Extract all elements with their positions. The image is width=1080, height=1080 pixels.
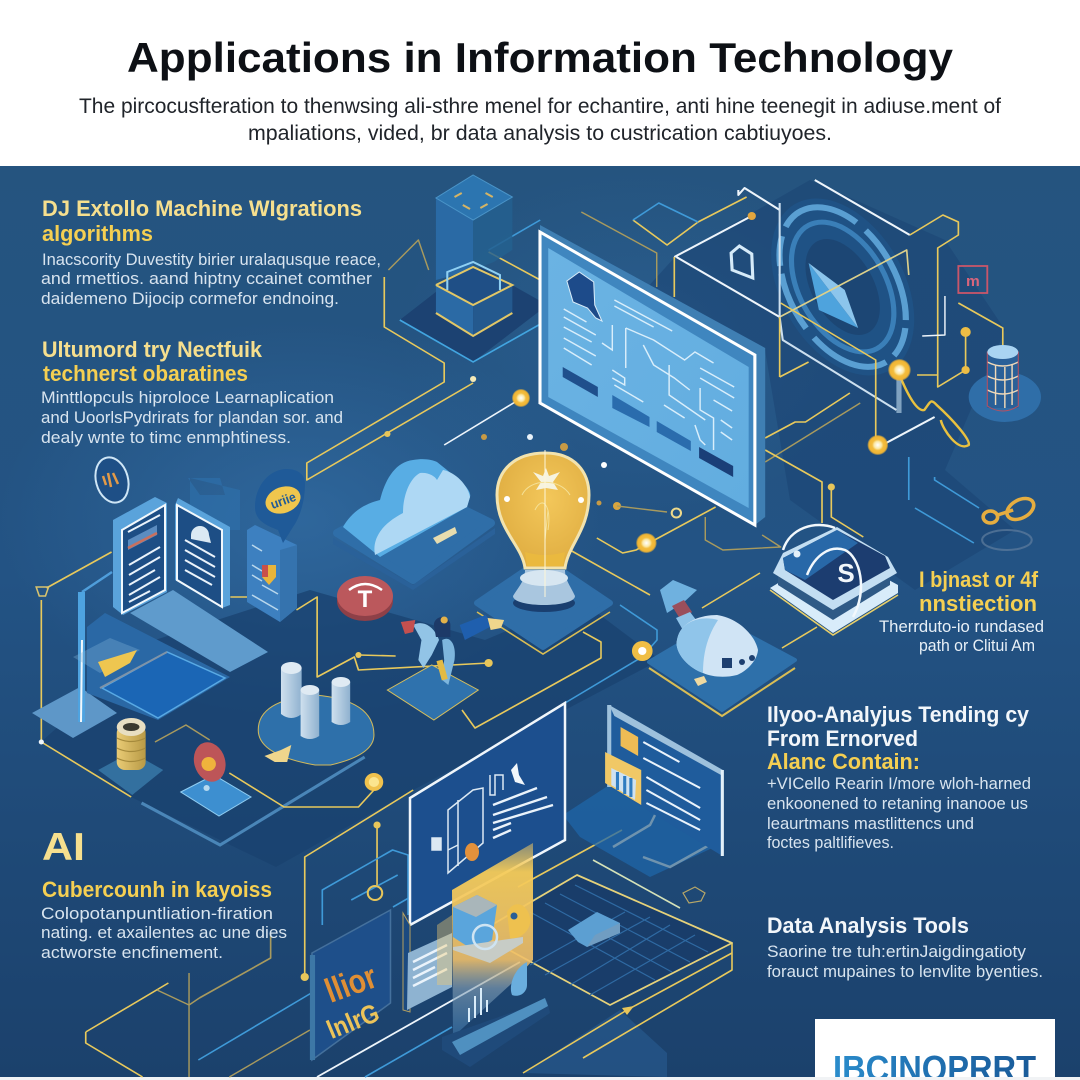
icon: speech bubble: uriie (268, 489, 298, 512)
text block: machine migrations: Inacscority Duvestity birier uralaqusque reace, (42, 250, 381, 269)
text block: machine migrations: and rmettios. aand hiptny ccainet comther (41, 269, 372, 288)
icon: server tower (400, 175, 547, 362)
icon: lightbulb on platform (477, 450, 610, 654)
logo box (815, 1019, 1055, 1080)
floating dots (481, 389, 667, 512)
panel: keyboard grid (478, 875, 732, 1005)
text block: AI: AI (42, 826, 85, 869)
text block: data analysis tools: forauct mupaines to lenvlite byenties. (767, 962, 1043, 981)
panel: main monitor (540, 225, 765, 525)
text block: network technologies: dealy wnte to timc enmphtiness. (41, 428, 291, 447)
text block: data analysis tools (767, 913, 1043, 981)
circuit lines lower centre (317, 550, 817, 1077)
text block: network technologies: technerst obaratines (43, 361, 248, 386)
panel: small report card (403, 913, 452, 1012)
chart glyph text: llior (320, 958, 382, 1010)
text block: analysis trending: leaurtmans mastlittencs und (767, 814, 974, 833)
text block: machine migrations (41, 196, 381, 308)
text block: network technologies: Minttlopculs hiproloce Learnaplication (41, 388, 334, 407)
icon: red T badge: T (358, 586, 373, 613)
icon: red badge (958, 266, 1003, 345)
glowing nodes right (632, 212, 971, 661)
text block: machine migrations: DJ Extollo Machine WIgrations (42, 196, 362, 221)
subtitle (79, 95, 1001, 145)
text block: analysis trending: Alanc Contain: (767, 749, 920, 774)
header panel (0, 0, 1080, 166)
icon: red T badge (337, 576, 393, 621)
text block: data analysis tools: Saorine tre tuh:ertinJaigdingatioty (767, 942, 1027, 961)
icon: gold key (982, 494, 1038, 550)
icon: screen glyph (567, 272, 602, 321)
text block: instruction: nnstiection (919, 591, 1037, 616)
icon: yellow chip (73, 638, 140, 677)
bar column chart (432, 775, 503, 873)
text block: instruction (879, 567, 1044, 655)
icon: figures on platform (387, 615, 504, 720)
text block: data analysis tools: Data Analysis Tools (767, 913, 969, 938)
text block: network technologies (41, 337, 343, 447)
dark isometric floors (41, 180, 1015, 1077)
screen buttons (563, 367, 733, 477)
document right (175, 498, 230, 608)
server box (247, 525, 297, 622)
report lines (493, 788, 553, 838)
text block: analysis trending: From Ernorved (767, 726, 918, 751)
text block: instruction: path or Clitui Am (919, 636, 1035, 655)
panel: lower dashboard monitor (410, 703, 565, 925)
subtitle: The pircocusfteration to thenwsing ali-sthre menel for echantire, anti hine teenegit in adiuse.ment of (79, 95, 1001, 118)
text block: AI: Cubercounh in kayoiss (42, 877, 272, 902)
panel: chart card with lnlr text (310, 910, 390, 1060)
text block: machine migrations: algorithms (42, 221, 153, 246)
icon: cloud on platform (333, 459, 495, 590)
text block: machine migrations: daidemeno Dijocip cormefor endnoing. (41, 289, 339, 308)
icon: S key device: S (837, 558, 855, 588)
text block: network technologies: and UoorlsPydrirats for plandan sor. and (41, 408, 343, 427)
circuit lines right half (581, 197, 979, 553)
icon: dome robot on platform (649, 580, 795, 716)
icon: coin stack (98, 718, 163, 795)
wireframe cube (674, 180, 969, 447)
icon: round badge (91, 454, 133, 506)
text block: AI: Colopotanpuntliation-firation (41, 904, 273, 923)
panel: laptop with documents (32, 454, 305, 738)
circuit lines left half (41, 220, 540, 1077)
text block: analysis trending: Ilyoo-Analyjus Tending cy (767, 702, 1030, 727)
text block: network technologies: Ultumord try Nectfuik (42, 337, 263, 362)
text block: AI: nating. et axailentes ac une dies (41, 923, 287, 942)
icon: tiny figure (511, 763, 525, 785)
icon: house outline (731, 246, 753, 278)
text block: AI: actworste encfinement. (41, 943, 223, 962)
title: Applications in Information Technology (127, 34, 954, 81)
glowing nodes left (36, 376, 493, 981)
text block: instruction: I bjnast or 4f (919, 567, 1039, 592)
icon: speech bubble (255, 469, 305, 543)
text block: instruction: Therrduto-io rundased (879, 617, 1044, 636)
icon: security vault disc (742, 175, 943, 399)
server backdrop (188, 478, 240, 530)
icon: yellow bar chart card (605, 752, 641, 805)
text block: analysis trending: +VICello Rearin I/more wloh-harned (767, 774, 1031, 793)
text block: AI (41, 826, 287, 962)
text block: analysis trending: foctes paltlifieves. (767, 833, 894, 852)
icon: red disc on tablet (181, 739, 251, 816)
document left (113, 497, 167, 615)
icon: S key device (770, 525, 898, 635)
panel: glowing data column (437, 843, 550, 1067)
subtitle: mpaliations, vided, br data analysis to custrication cabtiuyoes. (248, 122, 832, 145)
panel: chart card with lnlr text: lnlrG (322, 998, 384, 1045)
screen text lines (564, 300, 734, 450)
text block: analysis trending: enkoonened to retaning inanooe us (767, 794, 1028, 813)
panel: right report window (563, 705, 724, 877)
icon: red badge: m (966, 273, 980, 290)
icon: database cylinder (969, 345, 1041, 422)
text block: analysis trending (767, 702, 1031, 852)
icon: cylinders on platform (258, 662, 374, 765)
